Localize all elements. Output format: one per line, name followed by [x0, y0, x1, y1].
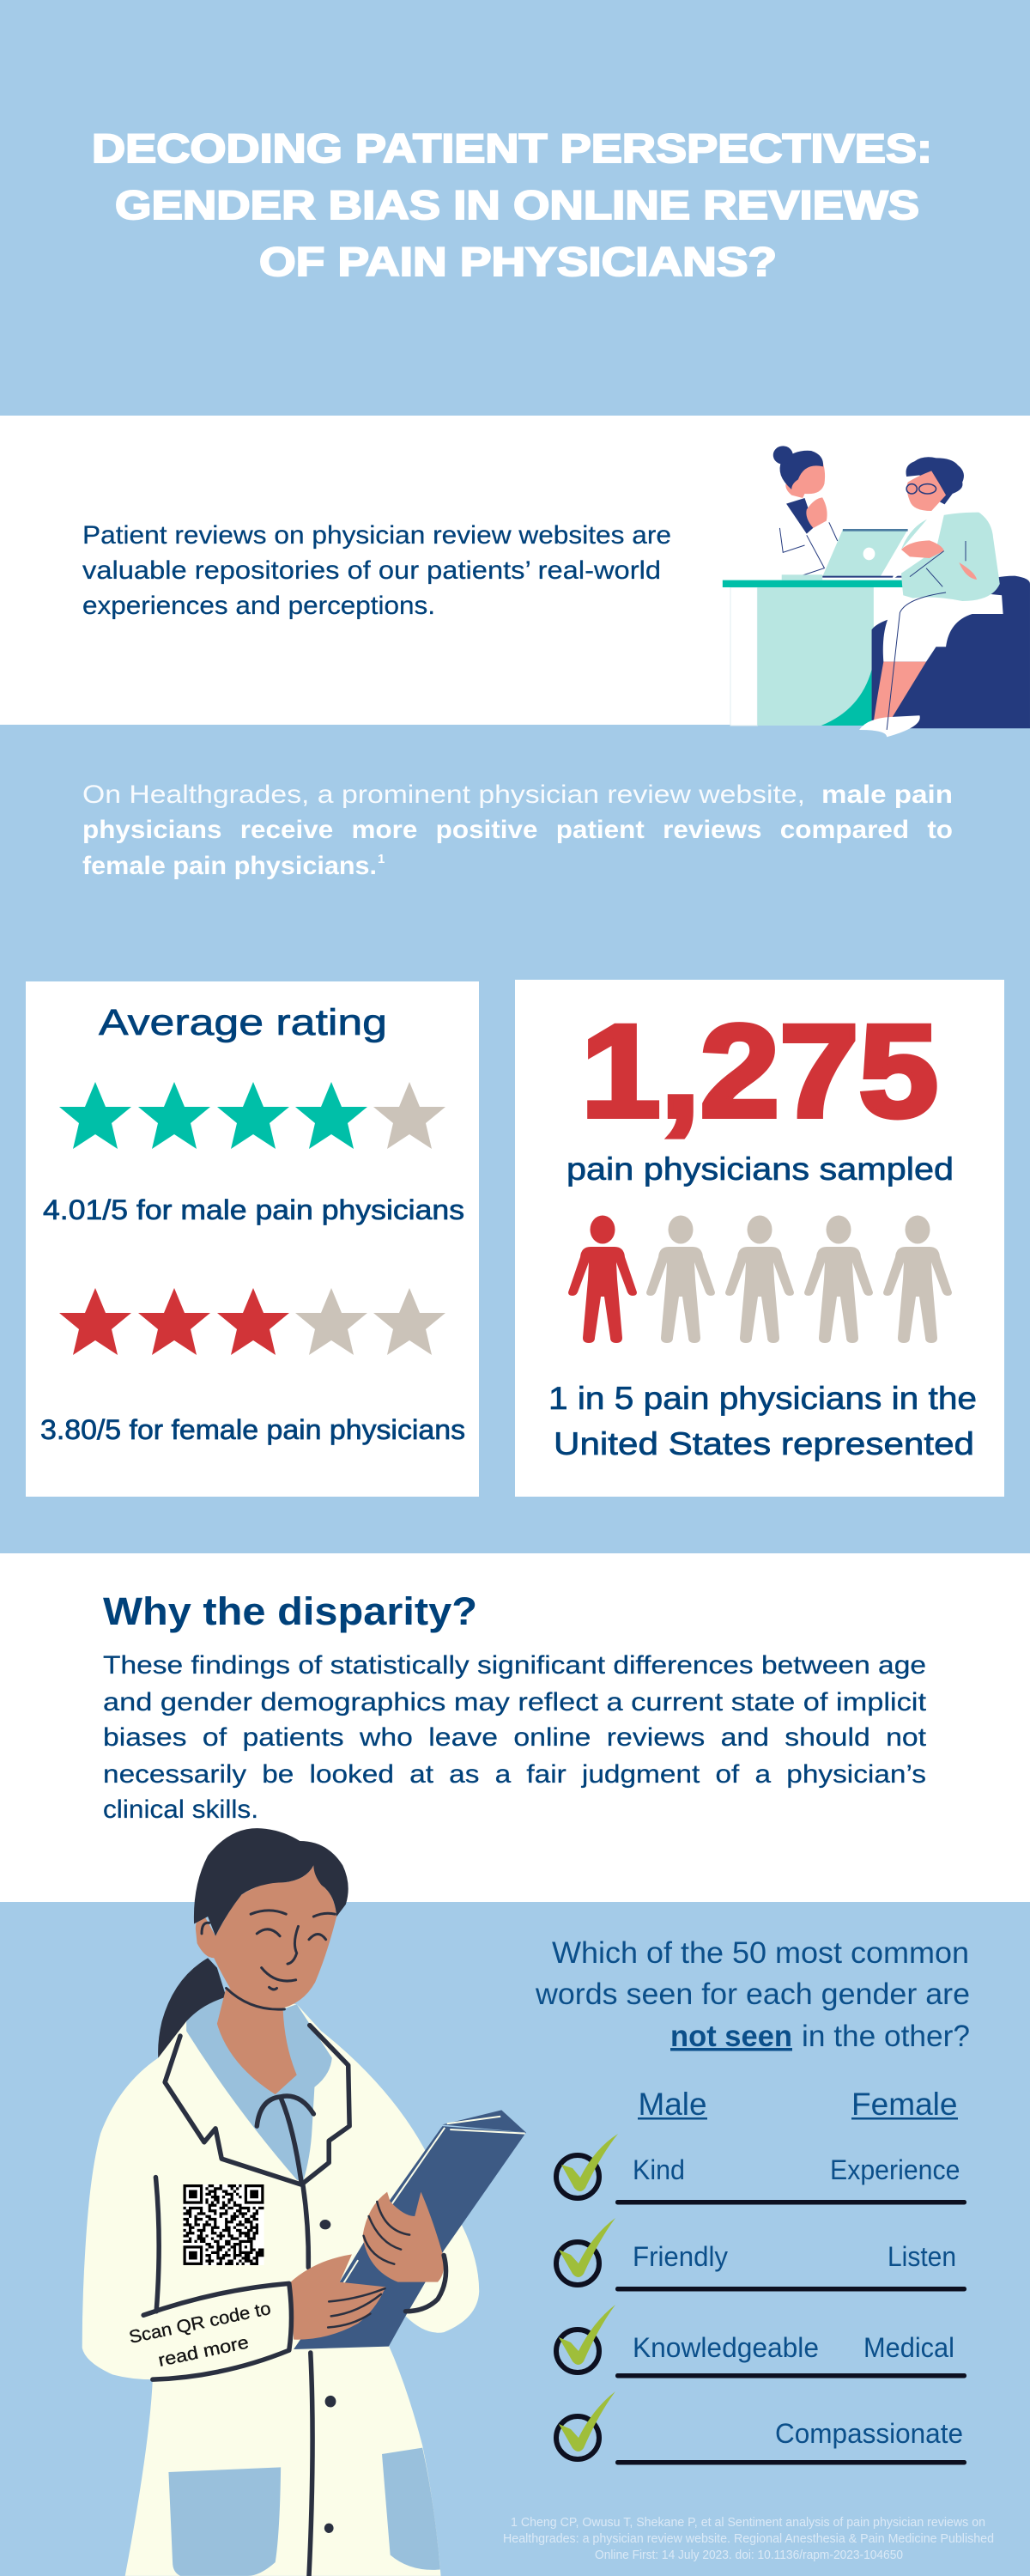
label: scan QR code: read more — [156, 2332, 251, 2371]
column headers: male and female — [638, 2087, 958, 2122]
panel: average rating — [26, 981, 479, 1497]
text block: question: Which of the 50 most common — [552, 1936, 969, 1970]
panel: intro band — [0, 416, 1030, 725]
label: one in five: 1 in 5 pain physicians in the — [548, 1381, 977, 1416]
column headers: male and female: Male — [639, 2087, 707, 2122]
row: knowledgeable / medical: Knowledgeable — [633, 2332, 819, 2363]
title: OF PAIN PHYSICIANS? — [259, 239, 777, 284]
heading: average rating: Average rating — [99, 1002, 387, 1043]
footnote: citation: Healthgrades: a physician review website. Regional Anesthesia & Pain Medicine Published — [503, 2532, 994, 2546]
row: knowledgeable / medical: Medical — [863, 2332, 954, 2363]
text block: disparity explanation — [103, 1651, 927, 1824]
text block: healthgrades finding — [82, 781, 953, 880]
text block: disparity explanation: clinical skills. — [103, 1795, 258, 1824]
label: female rating: 3.80/5 for female pain physicians — [40, 1414, 465, 1445]
label: scan QR code — [127, 2299, 272, 2371]
row: knowledgeable / medical — [556, 2305, 966, 2379]
footnote: citation: 1 Cheng CP, Owusu T, Shekane P, et al Sentiment analysis of pain physician reviews on — [511, 2516, 985, 2530]
text block: disparity explanation: biases of patients who leave online reviews and should not — [103, 1723, 927, 1752]
text block: healthgrades finding: On Healthgrades, a prominent physician review website, — [82, 781, 805, 809]
text block: intro — [82, 521, 671, 620]
row: friendly / listen: Friendly — [633, 2241, 728, 2272]
row: compassionate — [556, 2391, 966, 2464]
illustration: doctor and patient at desk — [723, 446, 1030, 737]
title: GENDER BIAS IN ONLINE REVIEWS — [115, 182, 919, 228]
text block: intro: experiences and perceptions. — [82, 592, 435, 620]
row: friendly / listen: Listen — [888, 2241, 956, 2272]
text block: healthgrades finding: male pain — [821, 781, 953, 809]
footnote: citation — [503, 2516, 994, 2562]
column headers: male and female: Female — [851, 2087, 958, 2122]
text block: intro: Patient reviews on physician review websites are — [82, 521, 671, 550]
list: word rows — [556, 2134, 966, 2464]
heading: why the disparity: Why the disparity? — [103, 1589, 477, 1633]
label: male rating: 4.01/5 for male pain physicians — [43, 1194, 464, 1225]
icon: QR code — [184, 2184, 264, 2265]
chart: male star rating — [59, 1082, 445, 1149]
text block: question: words seen for each gender are — [535, 1978, 970, 2011]
panel: why the disparity band — [0, 1553, 1030, 1902]
text block: disparity explanation: These findings of statistically significant differences between age — [103, 1651, 926, 1680]
row: kind / experience: Kind — [633, 2154, 685, 2185]
text block: disparity explanation: necessarily be looked at as a fair judgment of a physician’s — [103, 1760, 926, 1789]
row: friendly / listen — [556, 2218, 966, 2291]
panel: sample size — [515, 980, 1004, 1497]
title: DECODING PATIENT PERSPECTIVES: — [92, 125, 932, 171]
label: one in five: United States represented — [554, 1426, 974, 1461]
text block: healthgrades finding: 1 — [378, 852, 385, 866]
text block: healthgrades finding: physicians receive more positive patient reviews compared to — [82, 816, 953, 844]
row: compassionate: Compassionate — [775, 2418, 963, 2449]
text block: question: in the other? — [802, 2020, 970, 2053]
text block: intro: valuable repositories of our patients’ real-world — [82, 556, 661, 585]
footnote: citation: Online First: 14 July 2023. doi: 10.1136/rapm-2023-104650 — [595, 2549, 903, 2562]
label: one in five — [548, 1381, 977, 1461]
label: scan QR code: Scan QR code to — [127, 2299, 272, 2348]
row: kind / experience — [556, 2134, 966, 2205]
big number: 1,275 — [581, 998, 938, 1145]
icon: five people, one highlighted — [568, 1216, 952, 1343]
text block: question — [535, 1936, 970, 2053]
label: physicians sampled: pain physicians sampled — [566, 1151, 954, 1187]
title — [92, 125, 932, 284]
text block: disparity explanation: and gender demographics may reflect a current state of implicit — [103, 1688, 927, 1716]
chart: female star rating — [59, 1288, 445, 1355]
text block: healthgrades finding: female pain physicians. — [82, 852, 377, 880]
text block: question: not seen — [670, 2020, 792, 2053]
illustration: female doctor holding clipboard — [82, 1828, 526, 2576]
row: kind / experience: Experience — [830, 2154, 960, 2185]
